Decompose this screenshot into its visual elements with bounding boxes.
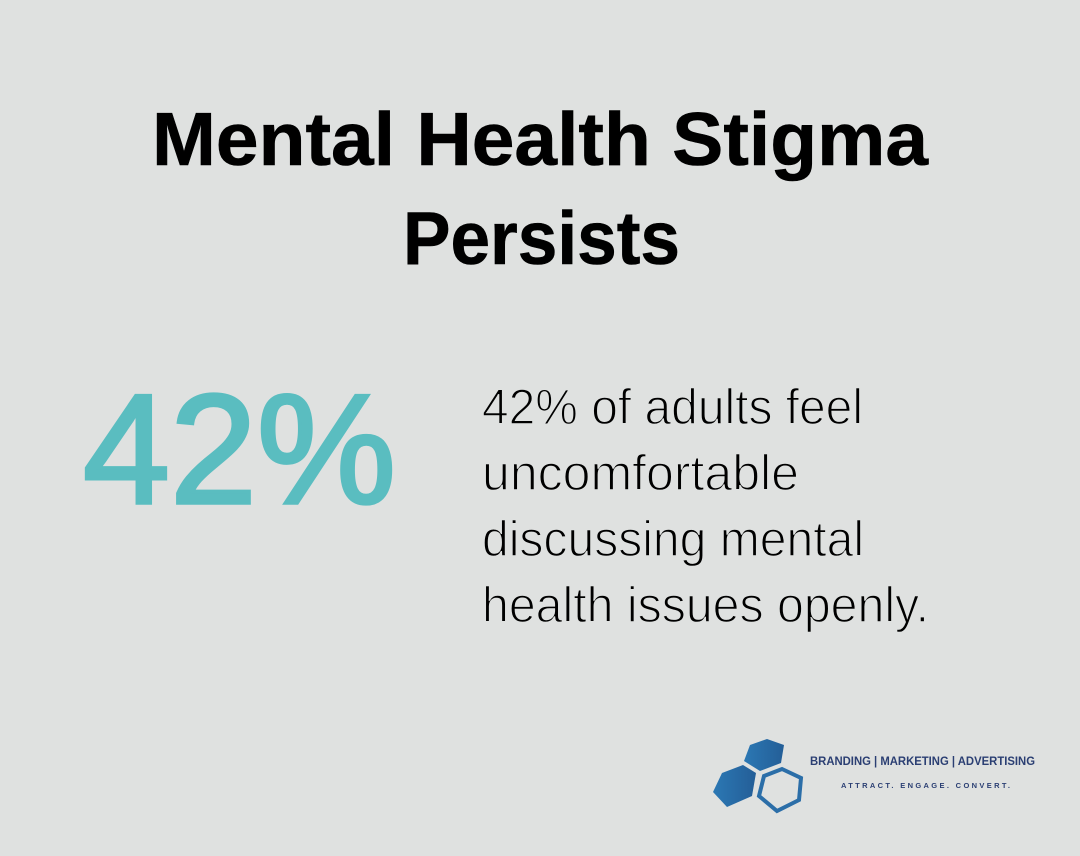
description text: uncomfortable — [482, 445, 799, 501]
logo tagline: BRANDING | MARKETING | ADVERTISING — [810, 756, 1035, 768]
logo — [713, 739, 1035, 811]
description text: health issues openly. — [482, 577, 929, 633]
title: Mental Health Stigma — [152, 97, 929, 181]
title: Persists — [403, 196, 680, 280]
description text: discussing mental — [482, 511, 864, 567]
title — [152, 97, 929, 280]
icon: hexagons — [713, 739, 801, 811]
description text — [482, 379, 929, 633]
logo tagline — [810, 756, 1035, 790]
big statistic 42%: 42% — [83, 363, 396, 537]
logo tagline: ATTRACT. ENGAGE. CONVERT. — [841, 781, 1010, 790]
description text: 42% of adults feel — [482, 379, 863, 435]
